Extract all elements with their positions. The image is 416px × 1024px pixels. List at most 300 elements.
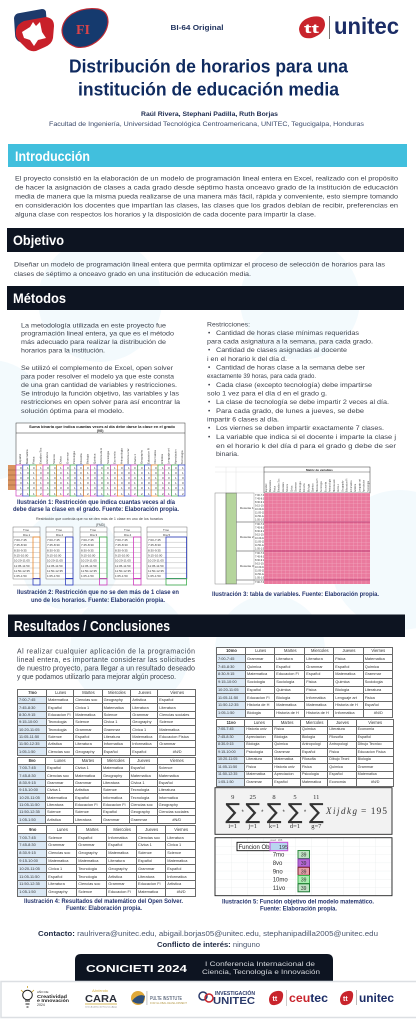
table: 9no schedule: Tecnologia	[78, 874, 97, 879]
figure 3: variable table: Quimica	[313, 483, 315, 492]
equation box: ∑	[288, 800, 303, 825]
table: 11vo schedule: Quimica	[329, 765, 343, 769]
table: 8vo schedule: #N/D	[172, 817, 181, 822]
text: restricciones: para cada asignatura a la semana, para cada grado.	[207, 338, 373, 346]
table: 7mo schedule: 11:05-11:50	[19, 734, 39, 739]
figure 1: binary sum table: Historia univ	[126, 448, 130, 464]
table: 7mo schedule: Lunes	[55, 690, 66, 695]
equation box: d=1	[290, 823, 300, 830]
figure 3: variable table: Historia univ	[333, 479, 336, 492]
equation box: *	[242, 810, 245, 816]
table: 11vo schedule: Apreciacion	[246, 735, 266, 739]
heading: Introducción	[8, 144, 407, 167]
text: metodología: programación lineal entera, ya que es el método	[21, 331, 174, 338]
table: día 5: 11:05-11:50	[148, 564, 164, 568]
table: 10mo schedule: 7:00-7:45	[218, 656, 234, 661]
table: día 4: Día 4	[124, 533, 132, 537]
table: 7mo schedule: Civica 1	[75, 705, 89, 710]
text: conclusiones: y que podamos utilizarlo para mejorar algún proceso.	[17, 674, 176, 681]
table: 11vo schedule: Matematica	[246, 772, 265, 776]
table: 11vo schedule: Quimica	[302, 727, 316, 731]
table: 8vo schedule: Ciencias soc	[131, 802, 153, 807]
text: restricciones: •	[208, 399, 211, 406]
table: 9no schedule: #N/D	[177, 889, 186, 894]
logo: año de creatividad	[21, 986, 69, 1007]
table: 9no schedule: Geography	[108, 866, 128, 871]
text: restricciones: i en el horario k del día d.	[207, 356, 287, 363]
table: 10mo schedule: Educacion Fi	[247, 695, 270, 700]
table: día 2: 11:50-12:35	[47, 569, 63, 573]
logo: Investigación UNITEC: UNITEC	[213, 995, 255, 1007]
table: día 1	[13, 527, 40, 585]
table: 11vo schedule: Grammar	[246, 780, 262, 784]
table: 9no schedule: Viernes	[174, 827, 188, 832]
figure 3: variable table: 11:05-11	[255, 512, 265, 514]
table: día 4	[114, 527, 141, 585]
table: 7mo schedule: 11:50-12:35	[19, 741, 39, 746]
table: día 1: 9:15-10:00	[14, 554, 29, 558]
figure 3: variable table: Informatica	[350, 480, 353, 492]
figure 1: binary sum table: 0101001010010010100101001	[20, 466, 184, 470]
table: 7mo schedule: Geography	[75, 749, 95, 754]
figure 3: variable table: Estudios Soc	[278, 478, 281, 492]
grade rows: 9no	[273, 869, 283, 875]
table: 10mo schedule: Martes	[284, 648, 297, 653]
text: restricciones: •	[208, 347, 211, 354]
table: 10mo schedule: Viernes	[371, 648, 385, 653]
figure 3: variable table: Fisica	[274, 485, 276, 492]
table: 9no schedule: Ciencias soc	[48, 850, 70, 855]
table: 11vo schedule: 7:45-8:30	[218, 735, 234, 739]
table: 9no schedule: Español	[108, 842, 122, 847]
table: día 5: 8:30-9:35	[148, 548, 161, 552]
table: 9no schedule: Jueves	[145, 827, 158, 832]
table: 11vo schedule: Biologia	[358, 757, 371, 761]
figure 3: variable table: 7:45-8:30	[255, 498, 266, 500]
grade rows: 8vo	[273, 861, 283, 867]
figure 3: variable table: Español	[265, 483, 268, 492]
table: 11vo schedule: Matematica	[274, 757, 293, 761]
table: 11vo schedule: Martes	[281, 720, 293, 725]
table: 11vo schedule: Economia	[329, 780, 346, 784]
table: 9no schedule: Artistica	[167, 881, 181, 886]
logo: CARA: Centro Académico de Recursos y Apoyo	[85, 1006, 118, 1008]
text: introducción: en consideración los docentes que impartían las clases, las clases que los grados debían de recibir, preferencias en	[15, 202, 398, 209]
figure 1: binary sum table: Antropologia	[119, 448, 123, 464]
solver objective function box: 39	[301, 886, 307, 892]
table: día 1: 8:30-9:35	[14, 548, 27, 552]
figure 1: binary sum table: Economia	[113, 451, 117, 464]
text: metodología: solución óptima para el modelo.	[21, 408, 124, 415]
table: 9no schedule: 11:05-11:50	[19, 874, 40, 879]
conference band	[75, 954, 333, 981]
table: 10mo schedule: Español	[247, 687, 261, 692]
solver objective function box: 39	[301, 878, 307, 884]
table: 10mo schedule: Historia de H	[335, 702, 358, 707]
table: 10mo schedule: Español	[306, 671, 320, 676]
table: 9no schedule: Educacion Fi	[138, 881, 160, 886]
table: 11vo schedule: Español	[358, 735, 371, 739]
heading: Introducción: Introducción	[15, 148, 90, 164]
logo: Investigación UNITEC	[199, 989, 255, 1007]
table: 7mo schedule: 7:00-7:45	[19, 697, 35, 702]
table: 8vo schedule: 11:50-12:35	[19, 809, 40, 814]
text: conclusiones: lineal entera, es importante considerar las solicitudes	[17, 657, 196, 664]
table: 9no schedule: Matematica	[78, 858, 98, 863]
table: 11vo schedule: Grammar	[274, 750, 290, 754]
table: día 5: Día 5	[163, 533, 171, 537]
table: día 4: 11:50-12:35	[115, 569, 131, 573]
logo: año de creatividad: Creatividad	[37, 994, 67, 999]
table: 8vo schedule: Literatura	[75, 817, 91, 822]
equation box: k=1	[269, 823, 279, 830]
table: día 3: 9:15-10:00	[81, 554, 96, 558]
logo: ceutec: ceutec	[289, 991, 328, 1005]
conference band: I Conferencia Internacional de	[205, 961, 315, 968]
table: 9no schedule: 1:05-1:50	[19, 889, 36, 894]
table: 11vo schedule: #N/D	[371, 780, 379, 784]
equation box: *	[283, 810, 286, 816]
table: 11vo schedule: Educacion Fisica	[358, 750, 386, 754]
table: 9no schedule: Geography	[78, 850, 98, 855]
figure 3: variable table	[215, 467, 370, 584]
table: 8vo schedule: Educacion Fi	[75, 802, 97, 807]
table: 9no schedule: Literatura	[138, 874, 154, 879]
text: restricciones: Cantidad de horas clase mínimas requeridas	[216, 330, 360, 337]
figure 1: binary sum table: Civica 1	[133, 454, 137, 464]
caption: ilustración 1: debe darse la clase en el grado. Fuente: Elaboración propia.	[13, 507, 179, 513]
table: 11vo schedule: 8:30-9:15	[218, 742, 234, 746]
equation box: ∑	[225, 800, 240, 825]
table: 8vo schedule: Civica 1	[75, 765, 89, 770]
heading: Métodos: Métodos	[13, 290, 66, 306]
table: 9no schedule: Science	[48, 835, 62, 840]
table: 8vo schedule: Grammar	[47, 780, 63, 785]
text: metodología: para poder resolver el modelo ya que este consta	[21, 374, 174, 381]
table: 8vo schedule: 11:05-11:50	[19, 802, 40, 807]
table: 10mo schedule: Matematica	[276, 702, 296, 707]
text: metodología	[21, 322, 180, 415]
figure 3: variable table: 9:15-10:00	[255, 534, 268, 536]
table: día 3: Día 3	[90, 533, 98, 537]
figure 1: binary sum table: Literatura	[45, 452, 49, 464]
table: 8vo schedule: Literatura	[159, 787, 175, 792]
authors: Raúl Rivera, Stephani Padilla, Ruth Borjas	[141, 111, 278, 118]
table: 10mo schedule: Fisica	[306, 687, 316, 692]
table: 10mo schedule: Grammar	[306, 664, 323, 669]
table: 10mo schedule: Quimica	[335, 679, 350, 684]
table: 10mo schedule: Historia de H	[247, 702, 270, 707]
figure 3: variable table: 7:00-7:45	[255, 523, 266, 526]
table: 9no schedule: Grammar	[108, 881, 125, 886]
table: 11vo schedule: Historia univ	[246, 727, 267, 731]
figure 1: binary sum table: Apreciacion	[174, 449, 178, 464]
table: 7mo schedule: Matematica	[159, 727, 179, 732]
table: 11vo schedule: Psicologia	[246, 750, 263, 754]
table: 8vo schedule: Artistica	[75, 787, 89, 792]
caption: ilustración 1	[13, 500, 179, 513]
figure 3: variable table: Educacion Fi	[347, 478, 349, 492]
table: 11vo schedule: Lunes	[254, 720, 265, 725]
logo: unitec: unitec	[334, 13, 399, 39]
table: 8vo schedule: Civica 1	[131, 780, 145, 785]
table: día 5: Tmo	[163, 528, 169, 532]
table: día 1: 11:05-11:50	[14, 564, 30, 568]
table: 9no schedule: Literatura	[48, 881, 65, 886]
table: 9no schedule: Grammar	[138, 866, 154, 871]
table: día 1: Tmo	[23, 528, 29, 532]
table: 8vo schedule: Jueves	[137, 758, 150, 763]
caption: ilustración 5	[222, 900, 374, 913]
table: 11vo schedule	[216, 719, 394, 787]
text: restricciones: exactamente 39 horas, para cada grado.	[207, 373, 316, 380]
table: 7mo schedule: Matematica	[48, 697, 68, 702]
table: 7mo schedule: Miercoles	[108, 690, 126, 695]
table: 10mo schedule: Lunes	[255, 648, 266, 653]
table: día 4: 10:20-11:05	[115, 559, 131, 563]
table: 7mo schedule: 7:45-8:30	[19, 705, 35, 710]
table: 7mo schedule: Español	[159, 697, 173, 702]
table: 11vo schedule: 11:05-11:50	[218, 765, 237, 769]
table: 8vo schedule: Grammar	[131, 817, 147, 822]
equation box: 25	[249, 794, 256, 801]
table: 10mo schedule: Grammar	[247, 656, 263, 661]
table: 7mo schedule: Español	[48, 705, 62, 710]
caption: ilustración 3: Ilustración 3: tabla de variables. Fuente: Elaboración propia.	[212, 592, 379, 598]
table: 7mo schedule: Science	[75, 719, 89, 724]
equation box: g=7	[311, 823, 322, 830]
table: 10mo schedule: Sociologia	[365, 679, 383, 684]
table: 10mo schedule: Quimica	[247, 664, 261, 669]
table: día 2: 1:05-1:50	[47, 574, 60, 578]
figure 3: variable table: Artistica	[354, 483, 357, 492]
grade rows: 10mo	[273, 878, 288, 884]
table: 8vo schedule: 8vo	[29, 758, 36, 763]
equation box: ∑	[245, 800, 260, 825]
logo: unitec small: unitec	[359, 991, 394, 1005]
figure 1: binary sum table	[8, 423, 185, 496]
table: día 2: 7:00-7:45	[47, 538, 60, 542]
table: 10mo schedule: Lenguaje art	[335, 695, 357, 700]
figure 3: variable table: 8:30-9:15	[255, 530, 266, 533]
table: 9no schedule: Lunes	[57, 827, 68, 832]
figure 3: variable table: Historia de H	[316, 478, 319, 492]
table: 11vo schedule: Fisica	[302, 765, 312, 769]
table: 7mo schedule: Literatura	[159, 705, 176, 710]
table: 9no schedule: Matematica	[48, 858, 68, 863]
figure 3: variable table: Civica	[291, 485, 293, 492]
text: metodología: restricciones en open solver para así encontrar la	[21, 399, 180, 406]
objective function cell	[237, 838, 288, 851]
table: 9no schedule: 9:15-10:00	[19, 858, 38, 863]
figure 1: binary sum table: Español	[18, 454, 22, 464]
table: 11vo schedule: 10:20-11:05	[218, 757, 237, 761]
table: día 5: 7:00-7:45	[148, 538, 161, 542]
text: restricciones: impartir 6 clases al día.	[207, 416, 279, 424]
table: 8vo schedule: Matematica	[75, 773, 95, 778]
figure 3: variable table: Grammar	[295, 482, 298, 492]
table: 11vo schedule: Psicologia	[302, 772, 319, 776]
figure 1: binary sum table: Informatica	[153, 450, 157, 464]
logo: ceutec: tt	[272, 996, 278, 1003]
table: día 2: 9:15-10:00	[47, 554, 62, 558]
authors: Facultad de Ingeniería, Universidad Tecnológica Centroamericana, UNITEC, Tegucigalpa, Honduras	[49, 121, 365, 128]
table: 10mo schedule: Español	[335, 664, 349, 669]
table: 8vo schedule: Matematica	[47, 795, 67, 800]
table: 11vo schedule: Biologia	[246, 742, 259, 746]
table: día 3: 7:00-7:45	[81, 538, 94, 542]
figure 3: variable table: Matriz de variables	[306, 468, 333, 472]
table: 8vo schedule: Español	[75, 795, 89, 800]
table: 7mo schedule: Literatura	[75, 741, 92, 746]
figure 1: binary sum table: 0101000101010010010001010	[20, 481, 184, 485]
figure 3: variable table: Sociologia	[321, 481, 323, 492]
heading: Resultados / Conclusiones	[8, 614, 405, 637]
caption: ilustración 4: Fuente: Elaboración propia.	[66, 906, 142, 912]
table: 8vo schedule: Geography	[103, 773, 122, 778]
logo: faculty shield	[14, 9, 54, 51]
equation box: 9	[231, 794, 234, 801]
table: 8vo schedule: Artistica	[47, 817, 61, 822]
conference band: CONICIETI 2024	[86, 964, 188, 975]
figure 3: variable table: Lenguaje art	[358, 479, 361, 492]
table: día 4: 1:05-1:50	[115, 574, 128, 578]
table: 10mo schedule: Literatura	[276, 656, 293, 661]
table: 7mo schedule: Jueves	[138, 690, 151, 695]
table: 9no schedule: Matematica	[167, 858, 187, 863]
table: 11vo schedule: 7:00-7:45	[218, 727, 234, 731]
equation box: 5	[293, 794, 297, 801]
text: metodología: de una gran cantidad de variables y restricciones.	[21, 382, 177, 389]
equation box: i=1	[228, 823, 237, 830]
text: introducción: El proyecto consistió en la elaboración de un modelo de programación lineal entera en Excel, realizado con el propósito	[15, 176, 398, 182]
figure 1: binary sum table: Biologia	[86, 454, 90, 464]
figure 3: variable table: Docente 2	[240, 535, 254, 539]
figure 1: binary sum table: Filosofia	[79, 453, 83, 464]
logo: CARA: CARA	[85, 994, 117, 1005]
figure 1: binary sum table: Suma binaria que indica cuantas veces al día debe darse la clase en el grado	[29, 425, 175, 429]
table: 7mo schedule: Ciencias sociales	[159, 712, 189, 717]
table: 10mo schedule: Quimica	[276, 687, 291, 692]
table: 7mo schedule: Español	[104, 749, 118, 754]
logo: unitec: tt	[304, 21, 320, 36]
title: Distribución de horarios para una	[69, 57, 349, 77]
figure 1: binary sum table: Estudios Soc	[38, 447, 42, 464]
table: 11vo schedule: Dibujo Tecnico	[358, 742, 382, 746]
figure 3: variable table: Matematica	[269, 479, 272, 492]
figure 3: variable table: Civica 1	[338, 483, 340, 492]
table: día 4: 11:05-11:50	[115, 564, 131, 568]
logo: unitec small: tt	[343, 996, 348, 1003]
table: 7mo schedule: Informatica	[104, 741, 123, 746]
table: 11vo schedule: Apreciacion	[274, 772, 294, 776]
table: 8vo schedule: Tecnologia	[131, 787, 149, 792]
logo: año de creatividad: AÑO DE	[37, 989, 49, 994]
logo: FI shield	[62, 9, 108, 47]
caption: ilustración 4	[24, 899, 183, 912]
table: 11vo schedule: Filosofia	[302, 757, 316, 761]
text: conclusiones: Al realizar cualquier aplicación de la programación	[17, 648, 195, 655]
table: 11vo schedule: Fisica	[274, 727, 284, 731]
figure 3: variable table: 11:05-11	[255, 570, 265, 572]
figure 1: binary sum table: Geography	[140, 450, 144, 464]
caption: ilustración 4: Ilustración 4: Resultados del matemático del Open Solver.	[24, 899, 183, 905]
table: 10mo schedule: Sociologia	[247, 679, 265, 684]
table: 9no schedule: Civica 1	[138, 842, 152, 847]
table: 10mo schedule: 9:15-10:00	[218, 679, 237, 684]
caption: ilustración 2: Ilustración 2: Restricción que no se den más de 1 clase en	[17, 590, 179, 596]
text: metodología: más adecuado para realizar la distribución de	[21, 339, 166, 346]
title: institución de educación media	[78, 79, 340, 99]
table: 8vo schedule: Science	[47, 809, 61, 814]
table: 11vo schedule: 11vo	[227, 720, 236, 725]
text: restricciones	[207, 322, 397, 458]
table: 9no schedule: Ciencias soc	[138, 835, 160, 840]
table: 11vo schedule: Antropologi	[329, 742, 348, 746]
table: 8vo schedule: 1:05-1:50	[19, 817, 36, 822]
caption: ilustración 2: uno de los horarios. Fuente: Elaboración propia.	[31, 598, 165, 604]
figure 1: binary sum table: Matematica	[25, 449, 29, 464]
table: 8vo schedule: Matematica	[131, 773, 151, 778]
table: 11vo schedule: Matematica	[358, 772, 377, 776]
table: 9no schedule: Informatica	[108, 835, 128, 840]
solver objective function box: 39	[301, 869, 307, 875]
text: introducción	[15, 176, 398, 218]
table: 7mo schedule: Artistica	[48, 741, 62, 746]
figure 3: variable table: 10:20-11	[255, 537, 265, 540]
table: 9no schedule: Tecnologia	[78, 866, 97, 871]
table: 10mo schedule: Español	[365, 702, 379, 707]
table: día 4: 7:45-8:30	[115, 543, 128, 547]
table: día 2: 10:20-11:05	[47, 559, 63, 563]
equation box: *	[304, 810, 307, 816]
table: 9no schedule: Español	[138, 858, 152, 863]
table: 7mo schedule: Grammar	[104, 727, 120, 732]
table: 11vo schedule: Dibujo Tecni	[329, 757, 349, 761]
heading: Resultados / Conclusiones: Resultados / Conclusiones	[14, 618, 170, 635]
table: 9no schedule: Miercoles	[113, 827, 131, 832]
text: restricciones: Los viernes se deben impartir exactamente 7 clases.	[216, 425, 384, 432]
table: 10mo schedule: Grammar	[365, 671, 381, 676]
table: 10mo schedule: Matematica	[247, 671, 267, 676]
figure 3: variable table: Geography	[341, 480, 344, 492]
figure 3: variable table: Antropologia	[329, 478, 332, 492]
table: 9no schedule: Literatura	[167, 835, 184, 840]
table: 9no schedule: 7:00-7:45	[19, 835, 36, 840]
table: 9no schedule: Español	[167, 866, 181, 871]
text: restricciones: Para cada grado, de lunes a jueves, se debe	[216, 408, 364, 415]
table: 7mo schedule: #N/D	[173, 749, 182, 754]
contact: Contacto: raulrivera@unitec.edu, abigail.borjas05@unitec.edu, stephanipadilla2005@unitec.edu	[38, 929, 378, 938]
code label: BI-64 Original	[170, 23, 224, 32]
table: 11vo schedule: Biologia	[274, 735, 287, 739]
table: día 1: 1:05-1:50	[14, 574, 27, 578]
table: 7mo schedule: 8:30-9:15	[19, 712, 35, 717]
table: 11vo schedule: Literatura	[246, 757, 262, 761]
table: 7mo schedule: Informatica	[132, 741, 152, 746]
figure 3: variable table: 7:00-7:45	[255, 494, 266, 497]
table: 7mo schedule: Ciencias soc	[75, 697, 97, 702]
table: 8vo schedule: Science	[75, 809, 89, 814]
text: metodología: La metodología utilizada en este proyecto fue	[21, 322, 166, 329]
logo: ceutec	[269, 990, 328, 1006]
figure 3: variable table: Science	[287, 483, 289, 492]
table: 11vo schedule: Español	[274, 780, 288, 784]
solver objective function box: 39	[301, 852, 307, 858]
table: 8vo schedule: Martes	[82, 758, 94, 763]
text: objetivo: clases de séptimo a onceavo grado en una institución de educación media.	[14, 271, 251, 278]
logo: unitec	[299, 13, 399, 39]
